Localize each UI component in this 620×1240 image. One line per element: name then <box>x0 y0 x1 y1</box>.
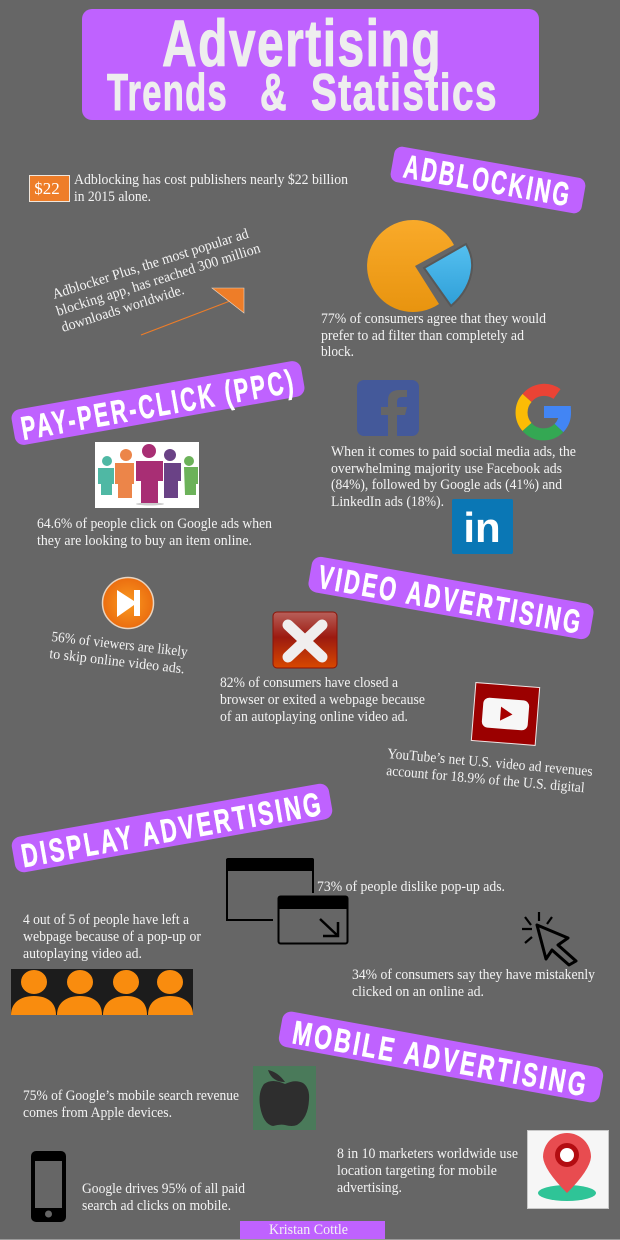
stat: 4 out of 5 <box>23 912 201 962</box>
stat: 8 in 10 marketers <box>337 1146 518 1196</box>
title line 2: Trends <box>107 64 228 122</box>
heading: Pay-Per-Click <box>10 360 306 448</box>
stat: 64.6% <box>37 516 273 549</box>
stat: 77% of consumers: prefer to ad filter than completely ad <box>321 328 525 344</box>
stat: social media ads: (84%), followed by Google ads (41%) and <box>331 477 563 493</box>
stat: 77% of consumers: block. <box>321 344 354 360</box>
stat: YouTube revenue (rotated text): account for 18.9% of the U.S. digital <box>386 763 585 796</box>
icon: pie chart <box>367 220 472 312</box>
stat: 75% Apple <box>23 1088 239 1121</box>
stat: 64.6%: 64.6% of people click on Google ads when <box>37 516 273 532</box>
stat: YouTube revenue (rotated text): YouTube’s net U.S. video ad revenues <box>387 746 594 780</box>
stat: 8 in 10 marketers: location targeting for mobile <box>337 1163 497 1179</box>
title line 2: Statistics <box>311 64 498 122</box>
stat: 34% of consumers: clicked on an online ad. <box>352 984 484 1000</box>
stat: $22 billion: in 2015 alone. <box>74 189 151 205</box>
stat: 75% Apple: 75% of Google’s mobile search revenue <box>23 1088 239 1104</box>
stat: social media ads <box>331 444 576 510</box>
stat: social media ads: When it comes to paid social media ads, the <box>331 444 576 460</box>
heading: Video Advertising <box>307 555 595 643</box>
stat: $22 billion: Adblocking has cost publishers nearly $22 billion <box>74 172 349 188</box>
icon: group of people <box>95 442 199 508</box>
stat: 34% of consumers <box>352 967 596 1000</box>
stat: 64.6%: they are looking to buy an item online. <box>37 533 252 549</box>
heading: Display Advertising: DISPLAY ADVERTISING <box>18 785 326 874</box>
heading: Pay-Per-Click: PAY-PER-CLICK (PPC) <box>18 362 298 447</box>
icon: apple <box>253 1066 316 1130</box>
stat: $22 billion <box>30 172 349 205</box>
heading: Display Advertising <box>10 782 334 876</box>
stat: 56% of viewers (rotated text): to skip online video ads. <box>49 646 185 677</box>
icon: skip button <box>102 578 154 628</box>
stat: 4 out of 5: autoplaying video ad. <box>23 946 142 962</box>
icon: location pin <box>528 1130 608 1208</box>
icon: smartphone <box>31 1151 66 1222</box>
title line 1: Advertising <box>162 6 442 80</box>
stat: 4 out of 5: 4 out of 5 of people have left a <box>23 912 190 928</box>
stat: 4 out of 5: webpage because of a pop-up or <box>23 929 201 945</box>
stat: 82% of consumers: of an autoplaying online video ad. <box>220 709 408 725</box>
stat: 82% of consumers: 82% of consumers have closed a <box>220 675 399 691</box>
title panel <box>82 6 539 122</box>
heading: Adblocking <box>389 145 587 216</box>
footer: author: Kristan Cottle <box>269 1222 348 1238</box>
icon: Google <box>522 390 565 434</box>
footer: author <box>240 1221 385 1239</box>
stat: 56% of viewers (rotated text): 56% of viewers are likely <box>51 629 189 661</box>
stat: social media ads: overwhelming majority use Facebook ads <box>331 461 562 477</box>
icon: red X <box>273 612 337 668</box>
icon: LinkedIn <box>452 499 513 554</box>
icon: YouTube <box>471 683 540 745</box>
stat: social media ads: LinkedIn ads (18%). <box>331 494 444 510</box>
icon: Facebook <box>357 380 419 436</box>
title line 2 <box>107 64 498 122</box>
arrow <box>141 288 244 335</box>
stat: 8 in 10 marketers: advertising. <box>337 1180 402 1196</box>
stat: 77% of consumers: 77% of consumers agree that they would <box>321 311 547 327</box>
stat: 75% Apple: comes from Apple devices. <box>23 1105 172 1121</box>
stat: Google drives 95% <box>82 1181 246 1214</box>
icon: orange people row <box>11 969 193 1015</box>
icon: LinkedIn: in <box>463 504 501 551</box>
stat: Google drives 95%: search ad clicks on mobile. <box>82 1198 231 1214</box>
icon: cursor click <box>522 912 576 965</box>
stat: Google drives 95%: Google drives 95% of all paid <box>82 1181 246 1197</box>
title line 2: & <box>260 64 288 122</box>
stat: 73% pop-ups: 73% of people dislike pop-up ads. <box>317 879 505 895</box>
stat: 8 in 10 marketers: 8 in 10 marketers worldwide use <box>337 1146 518 1162</box>
stat: 82% of consumers <box>220 675 425 725</box>
stat: 77% of consumers <box>321 311 547 360</box>
stat: 34% of consumers: 34% of consumers say they have mistakenly <box>352 967 596 983</box>
icon: $22 badge <box>30 176 70 202</box>
stat: Adblocker Plus (rotated text): Adblocker Plus, the most popular ad <box>50 226 251 303</box>
icon: $22 badge: $22 <box>34 179 60 198</box>
stat: Adblocker Plus (rotated text): downloads worldwide. <box>59 282 186 336</box>
stat: Adblocker Plus (rotated text): blocking app, has reached 300 million <box>54 240 263 320</box>
stat: 82% of consumers: browser or exited a webpage because <box>220 692 425 708</box>
stat: YouTube revenue (rotated text) <box>386 746 594 796</box>
stat: 56% of viewers (rotated text) <box>49 629 189 677</box>
icon: pop-up windows <box>226 858 348 944</box>
